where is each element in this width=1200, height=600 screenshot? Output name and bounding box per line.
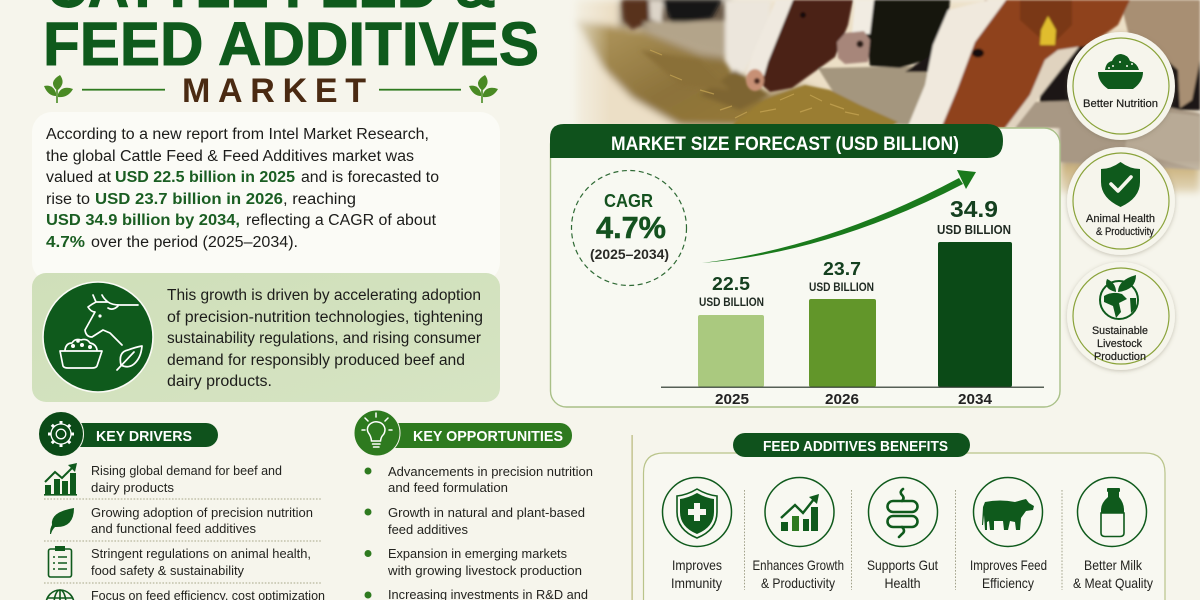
badge: better nutrition xyxy=(1067,32,1175,140)
panel: intro text: 4.7% xyxy=(46,234,85,251)
driver: precision nutrition xyxy=(50,505,313,536)
opportunity: precision nutrition: Advancements in precision nutrition xyxy=(388,464,593,479)
panel: intro text: rise to xyxy=(46,191,90,208)
panel: intro text: and is forecasted to xyxy=(301,169,439,186)
panel: intro text: USD 23.7 billion in 2026 xyxy=(95,191,283,208)
heading: key drivers: KEY DRIVERS xyxy=(96,428,192,445)
benefit: feed efficiency xyxy=(970,478,1047,591)
driver: rising demand: dairy products xyxy=(91,480,175,495)
bar chart xyxy=(661,196,1044,408)
subtitle: market xyxy=(44,72,498,110)
heading: feed additives benefits: FEED ADDITIVES BENEFITS xyxy=(763,438,948,455)
benefit: feed efficiency: Improves Feed xyxy=(970,557,1047,573)
opportunity: emerging markets: with growing livestock production xyxy=(387,563,582,578)
CAGR badge xyxy=(572,170,686,286)
benefit: milk and meat: Better Milk xyxy=(1084,557,1143,573)
bar 2026: 2026 xyxy=(825,391,859,408)
heading: key drivers xyxy=(38,412,218,456)
panel: intro text: valued at xyxy=(46,169,112,186)
panel: growth callout: This growth is driven by accelerating adoption xyxy=(167,287,481,304)
panel: intro text xyxy=(32,112,500,282)
heading: feed additives benefits xyxy=(733,433,970,457)
feed pile xyxy=(730,85,898,130)
benefit: gut health: Health xyxy=(884,575,920,591)
bar 2034: USD BILLION xyxy=(937,223,1011,237)
black cow xyxy=(864,0,950,68)
bar 2025: 2025 xyxy=(715,391,749,408)
benefit: feed efficiency: Efficiency xyxy=(982,575,1034,591)
yellow ear tag xyxy=(1040,16,1056,45)
panel: growth callout: sustainability regulations, and rising consumer xyxy=(167,330,481,347)
benefit: immunity: Immunity xyxy=(671,575,722,591)
feed clumps xyxy=(700,70,770,110)
panel: intro text: the global Cattle Feed & Feed Additives market was xyxy=(46,148,414,165)
driver: regulations: Stringent regulations on animal health, xyxy=(91,546,311,561)
badge: sustainable livestock production xyxy=(1067,262,1175,370)
trend arrow xyxy=(702,170,976,263)
panel: growth callout xyxy=(32,273,500,402)
badge: sustainable livestock production: Sustainable xyxy=(1092,325,1148,337)
driver: precision nutrition: Growing adoption of precision nutrition xyxy=(91,505,313,520)
bar 2034: 34.9 xyxy=(950,196,998,222)
heading: key opportunities: KEY OPPORTUNITIES xyxy=(413,428,563,445)
badge: animal health and productivity: Animal Health xyxy=(1086,213,1155,225)
panel: intro text: USD 34.9 billion by 2034, xyxy=(46,212,240,229)
panel: market size forecast xyxy=(550,124,1060,408)
benefit: growth: Enhances Growth xyxy=(752,557,844,573)
brown and white cow xyxy=(935,0,1130,128)
bar 2026 xyxy=(809,258,876,408)
panel: intro text: According to a new report from Intel Market Research, xyxy=(46,126,429,143)
benefit: milk and meat: & Meat Quality xyxy=(1073,575,1153,591)
panel: intro text: reflecting a CAGR of about xyxy=(246,212,437,229)
panel: key opportunities xyxy=(354,410,593,600)
badge: animal health and productivity xyxy=(1067,147,1175,255)
driver: rising demand xyxy=(44,463,282,496)
driver: regulations xyxy=(48,546,311,578)
photo: cattle feeding at trough xyxy=(540,0,1200,212)
opportunity: precision nutrition xyxy=(364,464,593,495)
panel: intro text: USD 22.5 billion in 2025 xyxy=(115,169,295,186)
opportunity: precision nutrition: and feed formulation xyxy=(388,480,508,495)
CAGR badge: (2025–2034) xyxy=(590,247,669,262)
panel: intro text: , reaching xyxy=(283,191,356,208)
subtitle: market: MARKET xyxy=(182,72,366,110)
bar 2026: USD BILLION xyxy=(809,282,874,294)
benefit: milk and meat xyxy=(1073,478,1153,591)
badge: sustainable livestock production: Production xyxy=(1094,351,1146,363)
badge: better nutrition: Better Nutrition xyxy=(1083,98,1158,110)
title: FEED ADDITIVES xyxy=(43,10,539,78)
bar 2034: 2034 xyxy=(958,391,993,408)
wall sections xyxy=(818,66,927,126)
chart header: MARKET SIZE FORECAST (USD BILLION) xyxy=(611,134,959,155)
opportunity: plant-based additives xyxy=(364,505,585,537)
tan cow at right xyxy=(1120,0,1200,108)
driver: regulations: food safety & sustainability xyxy=(91,563,244,578)
opportunity: plant-based additives: feed additives xyxy=(388,522,468,537)
badge: animal health and productivity: & Productivity xyxy=(1096,226,1154,238)
benefit: gut health: Supports Gut xyxy=(867,557,938,573)
CAGR badge: 4.7% xyxy=(596,210,666,245)
badge: sustainable livestock production: Livestock xyxy=(1097,338,1142,350)
benefit: growth xyxy=(752,478,844,591)
panel: feed additives benefits xyxy=(644,433,1165,600)
white neck of brown cow xyxy=(1000,43,1082,128)
panel: key drivers xyxy=(38,412,325,600)
bar 2034 xyxy=(937,196,1012,408)
icon: cow with feed bowl and leaf xyxy=(43,282,153,392)
opportunity: emerging markets: Expansion in emerging markets xyxy=(388,546,567,561)
opportunity: plant-based additives: Growth in natural and plant-based xyxy=(388,505,585,520)
bar 2025: USD BILLION xyxy=(699,297,764,309)
panel: growth callout: demand for responsibly produced beef and xyxy=(167,352,465,369)
panel: intro text: over the period (2025–2034). xyxy=(91,234,298,251)
opportunity: emerging markets xyxy=(364,546,582,578)
bar 2026: 23.7 xyxy=(823,258,861,279)
far cows xyxy=(622,0,654,30)
panel: growth callout: of precision-nutrition technologies, tightening xyxy=(167,309,483,326)
benefit: immunity xyxy=(662,478,732,591)
dark gap right xyxy=(1040,40,1200,110)
benefit: gut health xyxy=(867,478,938,591)
panel: growth callout: dairy products. xyxy=(167,373,272,390)
chart header xyxy=(550,124,1003,158)
driver: rising demand: Rising global demand for beef and xyxy=(91,463,282,478)
benefit: growth: & Productivity xyxy=(761,575,835,591)
brown cow xyxy=(762,0,853,92)
CAGR badge: CAGR xyxy=(604,191,653,211)
benefit: immunity: Improves xyxy=(672,557,722,573)
heading: key opportunities xyxy=(354,410,572,456)
driver: precision nutrition: and functional feed additives xyxy=(91,521,256,536)
bar 2025: 22.5 xyxy=(712,273,750,294)
bar 2025 xyxy=(698,273,764,408)
